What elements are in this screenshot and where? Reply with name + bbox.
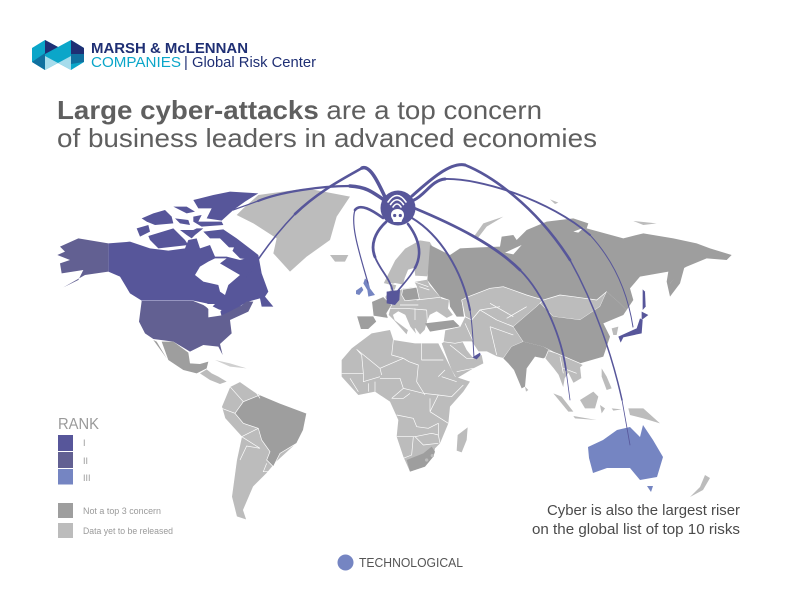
Arctic islands [473, 199, 657, 237]
Kamchatka [670, 265, 685, 297]
Germany [387, 290, 400, 305]
African continent [342, 330, 470, 472]
Arabia [442, 338, 483, 378]
Spain [357, 316, 377, 329]
title line 1: Large cyber-attacks are a top concern [57, 95, 542, 125]
South America [222, 382, 307, 520]
spider of attack lines [233, 165, 633, 445]
hacker icon [380, 190, 416, 226]
France [372, 297, 392, 318]
New Zealand [690, 475, 710, 497]
legend heading: RANK [58, 416, 100, 433]
icon body [380, 190, 416, 226]
line to eastern Canada [247, 168, 385, 277]
Australia [588, 425, 663, 492]
line to Germany east [397, 224, 419, 292]
Asia [427, 199, 732, 388]
world map [57, 188, 732, 520]
Australia and New Zealand [588, 425, 710, 497]
icon: wifi arcs [388, 196, 406, 207]
continent [222, 382, 307, 520]
line to Australia [412, 165, 630, 445]
category dot [338, 554, 354, 570]
African borders [342, 340, 463, 458]
legend rank II: II [83, 456, 88, 466]
legend rank I: I [83, 438, 86, 448]
Great Lakes [203, 304, 222, 316]
Russia [427, 218, 732, 317]
Indonesia, Philippines and New Guinea [525, 363, 660, 423]
Hudson Bay [195, 258, 240, 295]
line to Singapore [414, 208, 570, 400]
line to northern Canada [233, 186, 387, 210]
Africa and Arabia [342, 330, 483, 472]
Japan [618, 289, 648, 343]
line to Japan [414, 179, 633, 327]
Central Asia [462, 287, 543, 327]
United States [139, 301, 253, 355]
Madagascar [457, 427, 468, 452]
category tag: technological [338, 554, 463, 570]
line to United Kingdom [354, 207, 383, 283]
line to United Arab Emirates [412, 218, 474, 357]
logo text global risk center: | Global Risk Center [184, 55, 316, 71]
legend not a top 3 concern: Not a top 3 concern [83, 506, 161, 516]
Eastern Europe and Balkans [385, 279, 453, 335]
logo text line 2: COMPANIES [91, 54, 181, 71]
United Kingdom and Ireland [356, 278, 375, 297]
Alaska [57, 238, 108, 287]
legend data yet to be released: Data yet to be released [83, 526, 173, 536]
callout line 2: on the global list of top 10 risks [532, 522, 740, 538]
South Africa [407, 447, 435, 472]
United Arab Emirates [472, 353, 481, 359]
Mexico [162, 342, 208, 373]
Korea [612, 327, 618, 335]
North America [57, 192, 273, 384]
Brazil [235, 395, 307, 467]
title line 2: of business leaders in advanced economies [57, 123, 597, 153]
India [503, 342, 553, 388]
Poland [402, 287, 419, 301]
Mongolia [540, 292, 607, 320]
icon: skull [391, 209, 404, 222]
title [57, 95, 597, 153]
Middle East [443, 310, 523, 358]
line to Germany west [373, 222, 393, 292]
category label: TECHNOLOGICAL [359, 556, 463, 570]
Indochina [545, 351, 582, 388]
legend rank III: III [83, 473, 91, 483]
Scandinavia [383, 240, 437, 285]
logo text line 1: MARSH & McLENNAN [91, 41, 248, 57]
logo mark [32, 40, 84, 70]
Greenland and Iceland [237, 188, 350, 272]
Central America and Caribbean [200, 369, 227, 384]
Canada [108, 192, 273, 317]
Turkey [425, 320, 460, 332]
callout line 1: Cyber is also the largest riser [547, 503, 740, 519]
logo: Marsh & McLennan Companies [32, 40, 316, 71]
legend [58, 416, 173, 538]
Europe [356, 240, 460, 335]
China [513, 292, 627, 363]
callout [532, 503, 740, 538]
